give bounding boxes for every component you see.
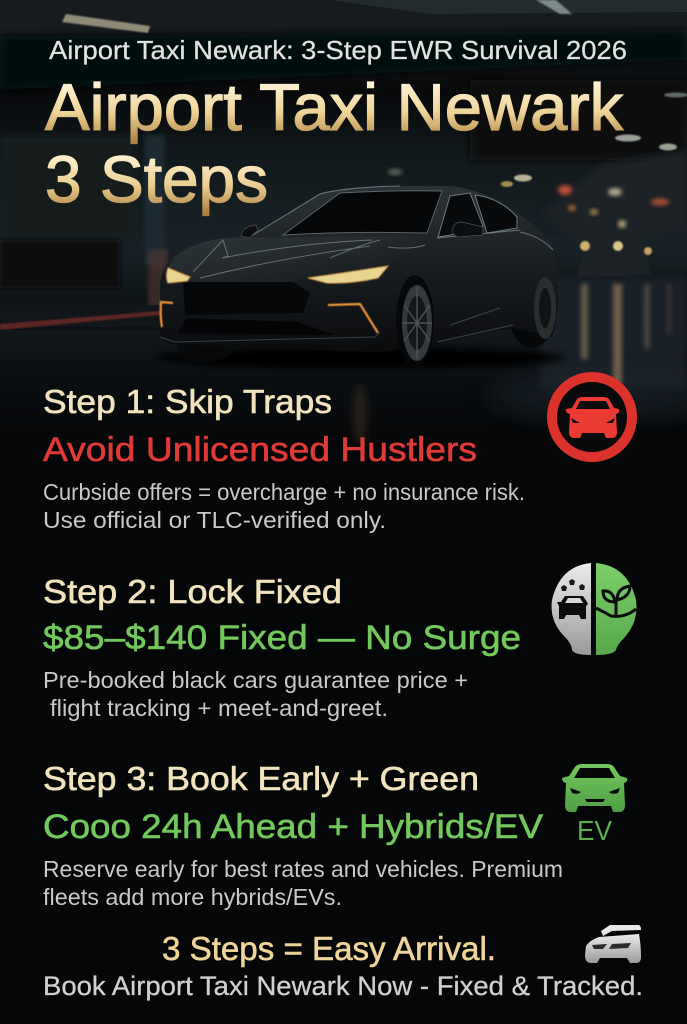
step 1 description: Curbside offers = overcharge + no insurance risk.: [43, 479, 525, 505]
panel: step 2: [43, 563, 636, 721]
icon: green EV car: [562, 764, 627, 846]
side windows: [438, 193, 517, 237]
rear tyre: [508, 270, 556, 348]
roofline and beltline highlights: [253, 186, 553, 250]
left headlight: [166, 268, 190, 283]
panel: step 1: [43, 377, 632, 533]
icon: half car half leaf bulb: [552, 563, 636, 655]
step 1 subheading: Avoid Unlicensed Hustlers: [43, 431, 477, 469]
step 2 heading: Step 2: Lock Fixed: [43, 573, 342, 610]
panel: step 3: [43, 760, 627, 910]
step 1 description: Use official or TLC-verified only.: [43, 507, 386, 533]
front grille: [183, 282, 310, 315]
step 3 description: Reserve early for best rates and vehicles. Premium: [43, 856, 563, 882]
hood: [168, 236, 423, 282]
footer callout: [43, 925, 643, 1001]
step 1 heading: Step 1: Skip Traps: [43, 383, 332, 420]
step 3 description: [43, 856, 563, 910]
distant car with headlights: [578, 232, 652, 277]
hood highlights: [193, 240, 425, 278]
step 3 heading: Step 3: Book Early + Green: [43, 760, 479, 797]
step 2 price subheading: $85–$140 Fixed — No Surge: [43, 619, 521, 657]
hero black sedan: [155, 186, 565, 369]
main title: [45, 70, 624, 216]
subtitle: Airport Taxi Newark: 3-Step EWR Survival 2026: [49, 35, 627, 65]
step 3 description: fleets add more hybrids/EVs.: [43, 884, 342, 910]
step 2 description: [43, 667, 468, 721]
windshield: [283, 191, 442, 235]
icon: red car in ring: [552, 377, 632, 457]
main title: Airport Taxi Newark: [45, 70, 624, 144]
footer call to action: Book Airport Taxi Newark Now - Fixed & Tracked.: [43, 971, 643, 1001]
wet floor light reflections: [581, 284, 671, 384]
right headlight: [308, 266, 388, 283]
step 2 description: flight tracking + meet-and-greet.: [50, 695, 388, 721]
front left tyre: [172, 335, 232, 362]
rear wheel: [534, 277, 556, 339]
front wheel: [396, 275, 434, 367]
step 2 description: Pre-booked black cars guarantee price +: [43, 667, 468, 693]
icon: silver car: [585, 925, 641, 963]
footer headline: 3 Steps = Easy Arrival.: [162, 930, 496, 967]
step 3 subheading: Cooo 24h Ahead + Hybrids/EV: [43, 808, 543, 846]
EV label: EV: [577, 815, 612, 846]
car body: [160, 186, 558, 352]
side mirrors: [241, 222, 483, 238]
main title: 3 Steps: [45, 142, 268, 216]
orange running lights: [161, 302, 378, 333]
step 1 description: [43, 479, 525, 533]
